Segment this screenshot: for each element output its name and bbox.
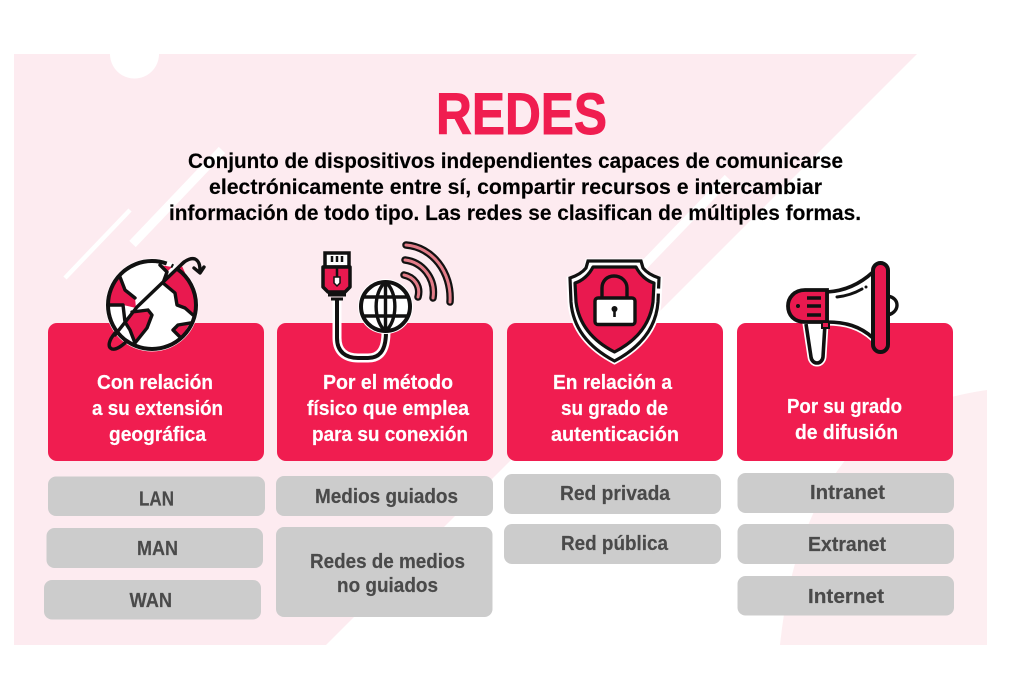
- option: Internet: [738, 576, 954, 616]
- card: metodo fisico: [277, 323, 493, 461]
- option: Internet: Internet: [808, 585, 884, 608]
- option: LAN: LAN: [139, 488, 174, 510]
- option: Redes de medios no guiados: [276, 527, 492, 617]
- option: WAN: [44, 580, 261, 620]
- card: metodo fisico: físico que emplea: [307, 398, 470, 420]
- card: metodo fisico: para su conexión: [312, 424, 468, 446]
- card: autenticacion: autenticación: [551, 424, 679, 446]
- option: Medios guiados: [276, 476, 493, 516]
- option: LAN: [48, 476, 265, 516]
- option: Intranet: [738, 473, 954, 513]
- option: Red privada: Red privada: [560, 482, 671, 505]
- card: extension geografica: Con relación: [97, 372, 213, 394]
- option: Red publica: Red pública: [561, 532, 669, 555]
- option: Extranet: [738, 524, 954, 564]
- panel: autenticacion: [504, 260, 723, 564]
- option: MAN: MAN: [137, 537, 178, 560]
- option: Red publica: [504, 524, 721, 564]
- intro text: electrónicamente entre sí, compartir recursos e intercambiar: [209, 176, 822, 199]
- option: WAN: WAN: [130, 589, 172, 612]
- card: extension geografica: geográfica: [109, 424, 207, 446]
- option: Redes de medios no guiados: Redes de medios: [310, 550, 465, 573]
- icon: globe: [106, 258, 204, 352]
- icon: shield with padlock: [568, 260, 661, 363]
- panel: difusion: [737, 263, 954, 616]
- title: REDES: [436, 82, 607, 147]
- card: autenticacion: [507, 323, 723, 461]
- intro text: Conjunto de dispositivos independientes capaces de comunicarse: [188, 150, 843, 173]
- icon: megaphone: [788, 263, 897, 363]
- option: Redes de medios no guiados: no guiados: [337, 574, 438, 597]
- card: extension geografica: a su extensión: [92, 398, 223, 420]
- card: difusion: de difusión: [795, 422, 898, 444]
- card: difusion: Por su grado: [787, 396, 902, 418]
- option: Red privada: [504, 474, 721, 514]
- intro text: información de todo tipo. Las redes se clasifican de múltiples formas.: [169, 202, 861, 225]
- option: Medios guiados: Medios guiados: [315, 485, 458, 508]
- panel: extension geografica: [44, 258, 265, 620]
- panel: metodo fisico: [276, 245, 493, 617]
- intro text: [169, 150, 861, 225]
- icon: cable, globe and wifi: [323, 245, 450, 358]
- card: metodo fisico: Por el método: [323, 372, 453, 394]
- card: extension geografica: [48, 323, 264, 461]
- option: MAN: [46, 528, 263, 568]
- option: Intranet: Intranet: [810, 481, 885, 504]
- card: difusion: [737, 323, 953, 461]
- card: autenticacion: su grado de: [561, 398, 668, 420]
- card: autenticacion: En relación a: [553, 372, 673, 394]
- option: Extranet: Extranet: [808, 533, 886, 556]
